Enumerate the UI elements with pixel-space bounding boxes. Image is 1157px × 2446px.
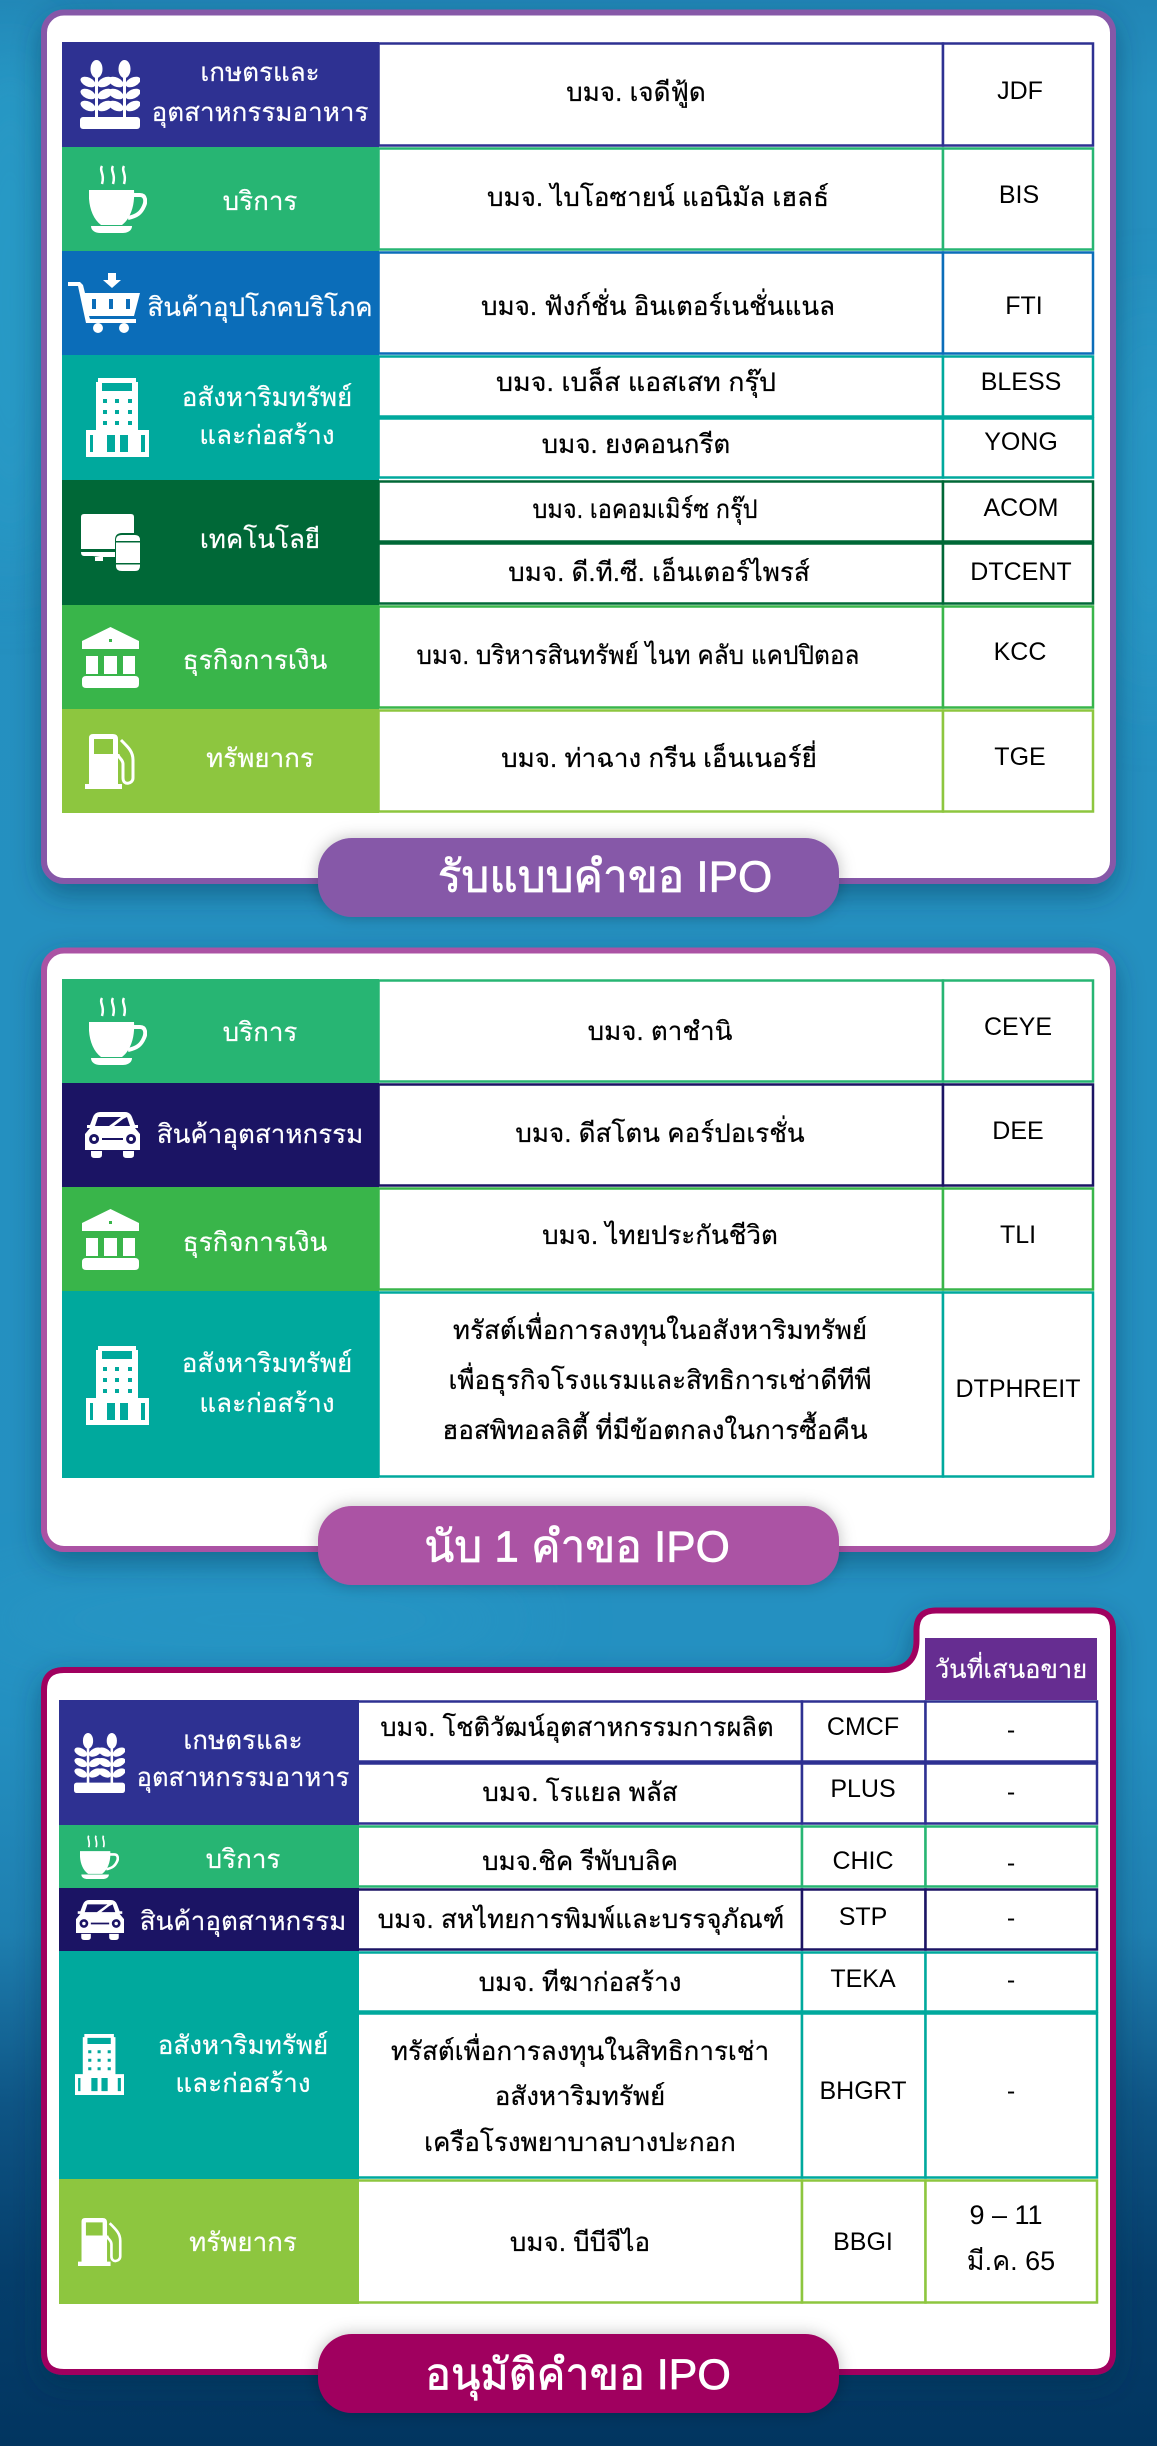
row: finance TLI: TLI [1000, 1221, 1036, 1249]
row: resources TGE: บมจ. ท่าฉาง กรีน เอ็นเนอร์ยี่ [501, 740, 817, 773]
row: property TEKA BHGRT: BHGRT [819, 2077, 907, 2105]
panel: IPO filing received [44, 12, 1113, 917]
row: property TEKA BHGRT: อสังหาริมทรัพย์ [495, 2081, 665, 2111]
row: services CHIC: CHIC [832, 1847, 894, 1875]
card frame with date tab [44, 1610, 1113, 2372]
row: finance KCC: ธุรกิจการเงิน [183, 645, 327, 676]
panel: 1 IPO filing counted [44, 950, 1113, 1585]
row: food industry JDF: อุตสาหกรรมอาหาร [152, 97, 368, 128]
row: consumer products FTI: สินค้าอุปโภคบริโภค [147, 292, 373, 323]
row: food industry CMCF PLUS: อุตสาหกรรมอาหาร [137, 1764, 349, 1793]
row: property BLESS YONG: อสังหาริมทรัพย์ [182, 382, 352, 412]
row: food industry CMCF PLUS: บมจ. โชติวัฒน์อุตสาหกรรมการผลิต [380, 1713, 774, 1743]
row: property BLESS YONG: และก่อสร้าง [199, 420, 335, 450]
heading pill: อนุมัติคำขอ IPO [425, 2351, 731, 2401]
row: food industry CMCF PLUS: เกษตรและ [183, 1725, 303, 1755]
row: industrials STP: สินค้าอุตสาหกรรม [140, 1906, 346, 1937]
card frame [44, 12, 1113, 881]
row: industrials STP: STP [839, 1903, 887, 1931]
row: food industry CMCF PLUS: PLUS [830, 1775, 896, 1803]
heading pill [318, 1506, 839, 1585]
row: food industry CMCF PLUS: - [1007, 1716, 1015, 1744]
row: industrials STP: บมจ. สหไทยการพิมพ์และบรรจุภัณฑ์ [378, 1904, 784, 1935]
row: resources TGE [62, 709, 1093, 813]
row: property DTPHREIT: ฮอสพิทอลลิตี้ ที่มีข้อตกลงในการซื้อคืน [442, 1411, 868, 1445]
row: food industry CMCF PLUS [59, 1700, 1097, 1825]
row: property DTPHREIT: และก่อสร้าง [199, 1388, 335, 1418]
row: resources BBGI: บมจ. บีบีจีไอ [510, 2227, 650, 2257]
row: industrials STP [59, 1888, 1097, 1951]
row: property BLESS YONG [62, 355, 1093, 480]
row: technology ACOM DTCENT: เทคโนโลยี [200, 524, 320, 554]
row: services BIS: บมจ. ไบโอซายน์ แอนิมัล เฮลธ์ [487, 182, 829, 212]
row: food industry JDF [62, 42, 1093, 147]
row: technology ACOM DTCENT: ACOM [984, 494, 1058, 522]
row: technology ACOM DTCENT [62, 480, 1093, 605]
row: consumer products FTI [62, 251, 1093, 355]
row: finance KCC [62, 605, 1093, 709]
heading pill [318, 838, 839, 917]
row: finance KCC: KCC [994, 638, 1046, 666]
row: property TEKA BHGRT: - [1007, 2077, 1015, 2105]
row: property BLESS YONG: YONG [984, 428, 1058, 456]
row: property DTPHREIT: ทรัสต์เพื่อการลงทุนในอสังหาริมทรัพย์ [453, 1312, 867, 1346]
row: technology ACOM DTCENT: บมจ. ดี.ที.ซี. เอ็นเตอร์ไพรส์ [508, 556, 810, 587]
row: finance TLI: ธุรกิจการเงิน [183, 1227, 327, 1258]
row: technology ACOM DTCENT: บมจ. เอคอมเมิร์ซ กรุ๊ป [532, 494, 758, 525]
row: finance KCC: บมจ. บริหารสินทรัพย์ ไนท คลับ แคปปิตอล [416, 640, 860, 670]
row: finance TLI [62, 1187, 1093, 1291]
row: food industry JDF: JDF [997, 77, 1043, 105]
row: services CEYE: CEYE [984, 1013, 1052, 1041]
row: food industry CMCF PLUS: - [1007, 1778, 1015, 1806]
row: property TEKA BHGRT: - [1007, 1966, 1015, 1994]
row: services CEYE: บมจ. ตาชำนิ [588, 1016, 733, 1046]
row: services BIS: BIS [999, 181, 1039, 209]
row: property DTPHREIT: เพื่อธุรกิจโรงแรมและสิทธิการเช่าดีทีพี [448, 1362, 872, 1396]
row: services BIS: บริการ [223, 186, 297, 216]
row: services BIS [62, 147, 1093, 251]
row: services CHIC [59, 1825, 1097, 1888]
row: property DTPHREIT: อสังหาริมทรัพย์ [182, 1348, 352, 1378]
row: services CEYE: บริการ [223, 1017, 297, 1047]
row: food industry JDF: บมจ. เจดีฟู้ด [566, 77, 706, 108]
row: resources BBGI [59, 2179, 1097, 2304]
row: industrials DEE [62, 1083, 1093, 1187]
row: resources TGE: ทรัพยากร [206, 743, 314, 773]
row: resources BBGI: 9 – 11 [969, 2200, 1043, 2230]
heading pill [318, 2334, 839, 2413]
row: property TEKA BHGRT: ทรัสต์เพื่อการลงทุนในสิทธิการเช่า [391, 2033, 769, 2067]
heading pill: รับแบบคำขอ IPO [438, 852, 772, 902]
row: industrials DEE: บมจ. ดีสโตน คอร์ปอเรชั่น [515, 1115, 805, 1148]
row: resources BBGI: ทรัพยากร [189, 2227, 297, 2257]
row: property TEKA BHGRT: และก่อสร้าง [175, 2068, 311, 2098]
row: property BLESS YONG: BLESS [981, 368, 1061, 396]
row: consumer products FTI: บมจ. ฟังก์ชั่น อินเตอร์เนชั่นแนล [481, 288, 835, 321]
row: finance TLI: บมจ. ไทยประกันชีวิต [542, 1220, 778, 1250]
row: services CHIC: บมจ.ชิค รีพับบลิค [482, 1846, 678, 1876]
card frame [44, 950, 1113, 1549]
panel: IPO approved [44, 1610, 1113, 2413]
date column header: วันที่เสนอขาย [935, 1652, 1087, 1684]
heading pill: นับ 1 คำขอ IPO [424, 1522, 730, 1572]
row: property TEKA BHGRT [59, 1951, 1097, 2179]
date column header [925, 1638, 1097, 1700]
row: property BLESS YONG: บมจ. ยงคอนกรีต [542, 429, 730, 459]
row: property TEKA BHGRT: เครือโรงพยาบาลบางปะกอก [424, 2127, 736, 2157]
row: resources BBGI: BBGI [833, 2228, 893, 2256]
row: food industry CMCF PLUS: CMCF [827, 1713, 899, 1741]
row: property BLESS YONG: บมจ. เบล็ส แอสเสท กรุ๊ป [496, 366, 776, 398]
row: industrials STP: - [1007, 1904, 1015, 1932]
row: property TEKA BHGRT: TEKA [830, 1965, 896, 1993]
row: consumer products FTI: FTI [1005, 292, 1043, 320]
row: property TEKA BHGRT: อสังหาริมทรัพย์ [158, 2030, 328, 2060]
row: technology ACOM DTCENT: DTCENT [970, 558, 1072, 586]
row: resources BBGI: มี.ค. 65 [967, 2246, 1055, 2276]
row: food industry CMCF PLUS: บมจ. โรแยล พลัส [482, 1777, 678, 1807]
row: services CHIC: บริการ [206, 1844, 280, 1874]
row: services CHIC: - [1007, 1849, 1015, 1877]
row: services CEYE [62, 979, 1093, 1083]
row: resources TGE: TGE [994, 743, 1046, 771]
row: property DTPHREIT [62, 1291, 1093, 1478]
row: industrials DEE: DEE [992, 1117, 1044, 1145]
row: industrials DEE: สินค้าอุตสาหกรรม [157, 1119, 363, 1150]
row: property DTPHREIT: DTPHREIT [956, 1375, 1080, 1403]
row: food industry JDF: เกษตรและ [200, 57, 320, 87]
row: property TEKA BHGRT: บมจ. ทีฆาก่อสร้าง [479, 1967, 681, 1997]
